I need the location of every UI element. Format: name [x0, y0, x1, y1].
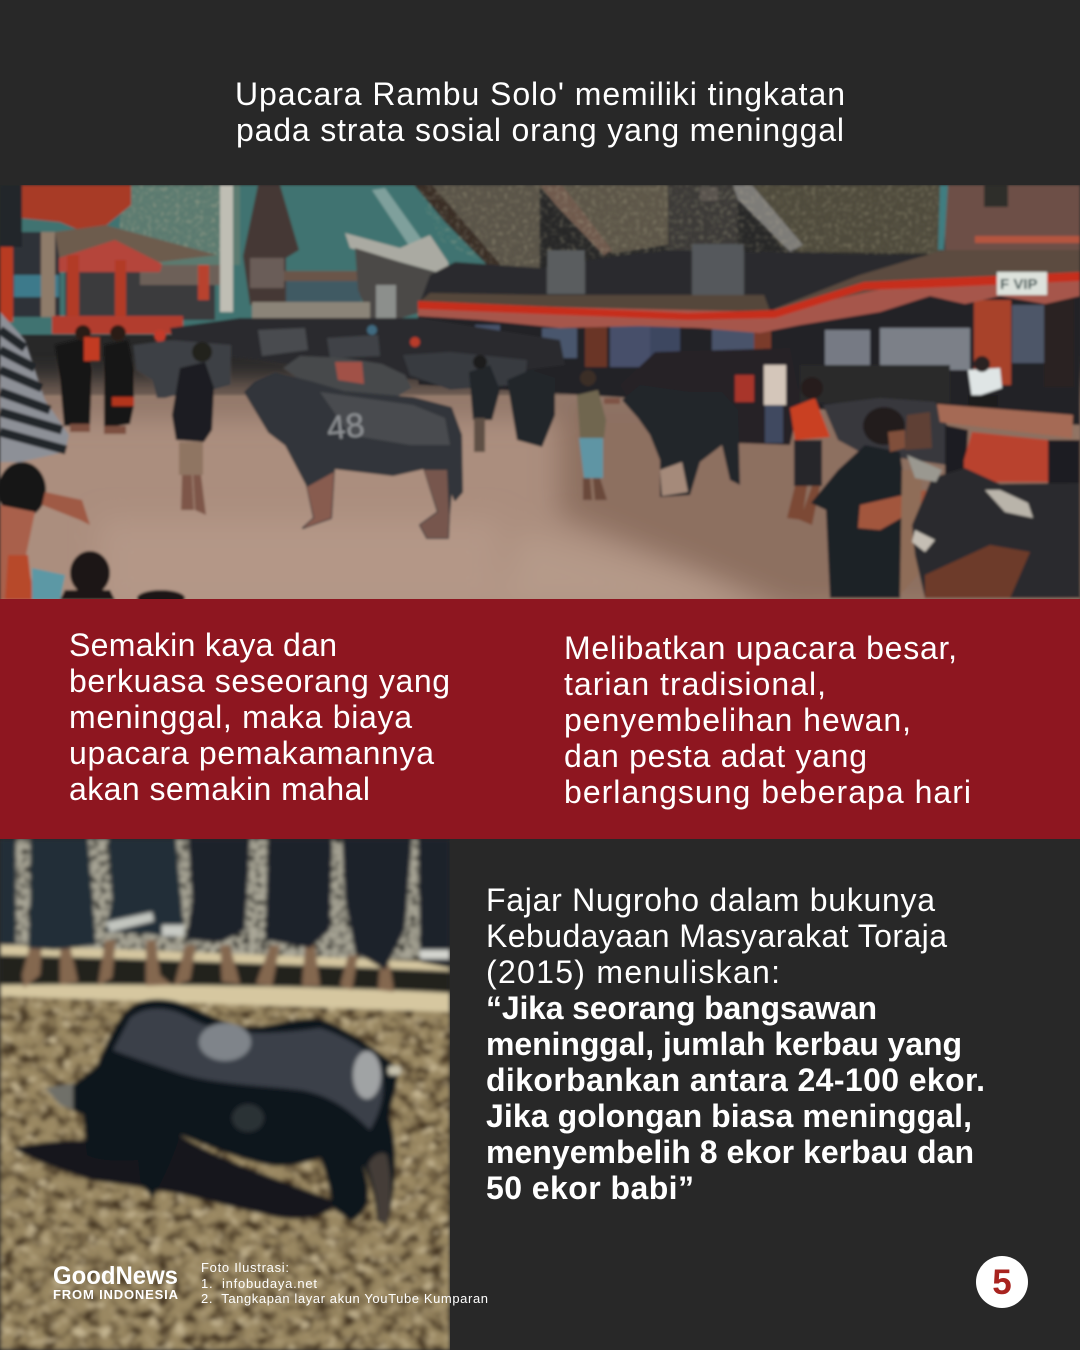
page number badge: 5 [992, 1263, 1012, 1302]
quote in bold: menyembelih 8 ekor kerbau dan [486, 1134, 974, 1170]
photo credits: 1. infobudaya.net [201, 1276, 317, 1291]
text: right column: penyembelihan hewan, [564, 702, 911, 738]
quote text block: Kebudayaan Masyarakat Toraja [486, 918, 947, 954]
logo: GoodNews from Indonesia: GoodNews [53, 1262, 178, 1290]
middle people and buffalo [507, 370, 555, 447]
photo credits: Foto Ilustrasi: [201, 1260, 289, 1275]
quote text block: (2015) menuliskan: [486, 954, 780, 990]
photo: black pig in front of people in sarongs [0, 839, 450, 1350]
distant crowd and buffalo [170, 318, 565, 382]
photo credits: 2. Tangkapan layar akun YouTube Kumparan [201, 1291, 488, 1306]
dark hall [418, 285, 1080, 425]
red awning [418, 275, 1080, 333]
text: left column [69, 627, 450, 807]
striped spectator left [0, 312, 69, 462]
quote in bold: “Jika seorang bangsawan [486, 990, 877, 1026]
text: left column: Semakin kaya dan [69, 627, 337, 663]
painted buffalo [283, 356, 412, 396]
quote in bold: meninggal, jumlah kerbau yang [486, 1026, 962, 1062]
pig shadow [13, 1135, 333, 1219]
photo credits [201, 1260, 488, 1306]
text: right column [564, 630, 971, 810]
farmer holding buffalo [811, 407, 933, 598]
sand ledge [0, 945, 450, 1012]
quote in bold [486, 990, 985, 1206]
child with patterned shirt [577, 370, 620, 500]
title: Upacara Rambu Solo' memiliki tingkatan [235, 76, 845, 112]
dirt ground [0, 985, 450, 1350]
standing man in black [172, 342, 214, 515]
table and red steps [937, 404, 1080, 490]
red columns [974, 300, 1011, 385]
band: red text panel [0, 599, 1080, 839]
text: left column: upacara pemakamannya [69, 735, 434, 771]
upper right building [945, 185, 1080, 250]
text: right column: tarian tradisional, [564, 666, 826, 702]
text: left column: akan semakin mahal [69, 771, 370, 807]
thatched roofs [432, 185, 541, 270]
sarongs [0, 839, 184, 950]
quote in bold: Jika golongan biasa meninggal, [486, 1098, 972, 1134]
buffalo behind right [823, 398, 947, 465]
main buffalo number 48 [245, 373, 462, 538]
background tongkonan house [243, 185, 299, 305]
page number badge [976, 1256, 1028, 1308]
spectators foreground bottom left [0, 462, 185, 606]
quote in bold: 50 ekor babi” [486, 1170, 694, 1206]
large buffalo foreground [907, 455, 1080, 598]
left pavilions [11, 231, 61, 318]
text: right column: Melibatkan upacara besar, [564, 630, 957, 666]
quote in bold: dikorbankan antara 24-100 ekor. [486, 1062, 985, 1098]
quote text block: Fajar Nugroho dalam bukunya [486, 882, 935, 918]
text: right column: berlangsung beberapa hari [564, 774, 971, 810]
main buffalo number 48: 48 [325, 406, 366, 448]
man in red shirt [787, 377, 830, 525]
pig snout [45, 1083, 78, 1112]
logo: GoodNews from Indonesia: FROM INDONESIA [53, 1287, 179, 1302]
stone wall [0, 839, 450, 959]
text: left column: berkuasa seseorang yang [69, 663, 450, 699]
title: pada strata sosial orang yang meninggal [236, 112, 844, 148]
text: right column: dan pesta adat yang [564, 738, 867, 774]
photo: buffalo gathering at Toraja village [0, 185, 1080, 610]
photo: buffalo gathering at Toraja village: F VIP [1000, 276, 1038, 293]
forest background [8, 185, 487, 337]
ground [0, 395, 1080, 605]
bare feet [22, 940, 394, 992]
audience under the hall [639, 348, 795, 446]
logo: GoodNews from Indonesia [53, 1262, 179, 1302]
quote text block [486, 882, 985, 1206]
pig body [73, 999, 401, 1225]
text: left column: meninggal, maka biaya [69, 699, 412, 735]
title [235, 76, 845, 148]
buffalo group left [133, 340, 231, 398]
black-sarong people [55, 325, 134, 434]
black buffalo center right [622, 385, 740, 497]
